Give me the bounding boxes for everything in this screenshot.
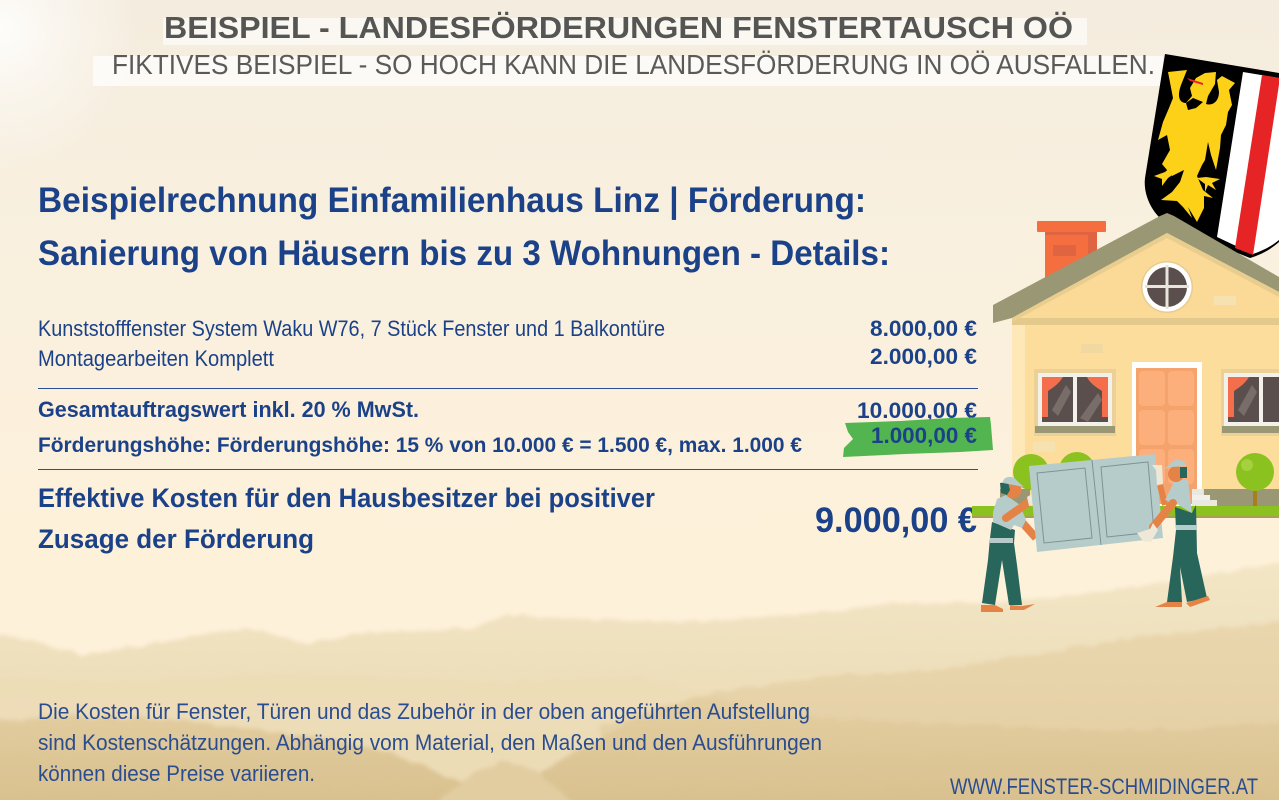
talons	[1154, 166, 1220, 192]
illustration: house	[972, 213, 1279, 518]
line item: windows: 8.000,00 €	[870, 316, 977, 341]
right window	[1221, 369, 1279, 436]
effective cost: Effektive Kosten für den Hausbesitzer bei positiver	[38, 483, 655, 513]
left window	[1034, 369, 1116, 436]
steps and plinth	[1192, 489, 1279, 506]
tree	[1236, 453, 1274, 506]
back arm	[1160, 485, 1165, 505]
heading	[38, 180, 890, 273]
line item: installation: 2.000,00 €	[870, 344, 977, 369]
front arm	[1006, 500, 1032, 518]
disclaimer: Die Kosten für Fenster, Türen und das Zubehör in der oben angeführten Aufstellung	[38, 699, 810, 724]
subsidy: Förderungshöhe: Förderungshöhe: 15 % von 10.000 € = 1.500 €, max. 1.000 €	[38, 433, 802, 457]
heading: Beispielrechnung Einfamilienhaus Linz | Förderung:	[38, 180, 866, 220]
illustration: right worker	[1137, 460, 1210, 607]
title banner: BEISPIEL - LANDESFÖRDERUNGEN FENSTERTAUSCH OÖ	[164, 10, 1073, 45]
head	[1004, 482, 1022, 498]
wall	[1025, 318, 1279, 508]
subsidy	[38, 417, 993, 457]
front arm	[1153, 503, 1173, 527]
gable	[1012, 233, 1279, 318]
subtitle banner: FIKTIVES BEISPIEL - SO HOCH KANN DIE LANDESFÖRDERUNG IN OÖ AUSFALLEN.	[112, 49, 1155, 80]
back arm	[1020, 520, 1036, 538]
icon: coat of arms	[1145, 54, 1279, 258]
total: Gesamtauftragswert inkl. 20 % MwSt.	[38, 397, 419, 422]
roof	[993, 213, 1279, 323]
legs	[1167, 505, 1207, 602]
illustration: left worker	[981, 477, 1041, 612]
legs	[982, 522, 1022, 605]
heading: Sanierung von Häusern bis zu 3 Wohnungen - Details:	[38, 233, 890, 273]
total	[38, 397, 977, 423]
effective cost: 9.000,00 €	[815, 501, 977, 540]
line item: windows: Kunststofffenster System Waku W76, 7 Stück Fenster und 1 Balkontüre	[38, 316, 665, 341]
total: 10.000,00 €	[857, 398, 977, 423]
effective cost: Zusage der Förderung	[38, 524, 314, 554]
disclaimer: können diese Preise variieren.	[38, 761, 315, 786]
subsidy: 1.000,00 €	[871, 423, 977, 448]
line item: installation	[38, 344, 977, 371]
cost table	[38, 316, 993, 554]
shirt	[1165, 480, 1192, 513]
bushes	[1000, 452, 1095, 506]
line item: installation: Montagearbeiten Komplett	[38, 346, 274, 371]
eagle	[1154, 70, 1235, 222]
green highlight	[843, 417, 993, 457]
round window	[1141, 261, 1193, 313]
chimney	[1037, 221, 1106, 292]
lawn	[972, 506, 1279, 517]
illustration: window panel	[1029, 454, 1163, 552]
door	[1132, 362, 1202, 510]
disclaimer: sind Kostenschätzungen. Abhängig vom Material, den Maßen und den Ausführungen	[38, 730, 822, 755]
effective cost	[38, 483, 977, 554]
head	[1168, 466, 1184, 482]
disclaimer	[38, 699, 822, 786]
shirt	[993, 495, 1026, 530]
